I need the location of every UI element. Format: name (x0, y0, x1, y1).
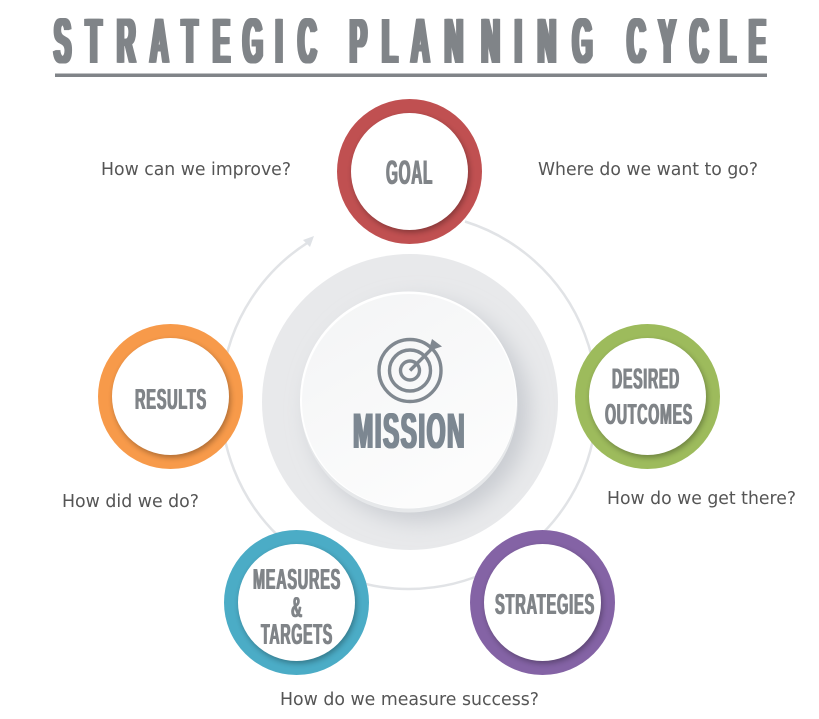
desired outcomes label (605, 364, 693, 431)
node: measures and targets (224, 530, 369, 675)
desired outcomes label: DESIRED (612, 364, 680, 396)
title: STRATEGIC PLANNING CYCLE (54, 7, 766, 77)
measures and targets label (253, 564, 341, 651)
node: measures and targets: MEASURES (253, 564, 341, 596)
node: desired outcomes: OUTCOMES (605, 399, 693, 431)
question: measures: How do we measure success? (280, 689, 539, 710)
question: desired outcomes: How do we get there? (607, 488, 796, 509)
measures and targets label: TARGETS (261, 619, 333, 651)
title underline (55, 74, 767, 77)
strategies label: STRATEGIES (495, 589, 595, 621)
measures and targets label: & (291, 592, 303, 624)
question: results: How did we do? (62, 491, 199, 512)
node: goal: GOAL (386, 154, 433, 192)
question: goal: Where do we want to go? (538, 159, 758, 180)
node: results (98, 324, 243, 469)
node: strategies (470, 530, 615, 675)
mission disc: MISSION (353, 403, 466, 459)
mission disc (262, 254, 558, 550)
results label: RESULTS (135, 384, 207, 416)
node: goal (337, 99, 482, 244)
icon: target with arrow (379, 339, 442, 402)
node: desired outcomes (575, 324, 720, 469)
question: results to goal: How can we improve? (101, 159, 291, 180)
cycle ring with arrow (221, 222, 597, 589)
